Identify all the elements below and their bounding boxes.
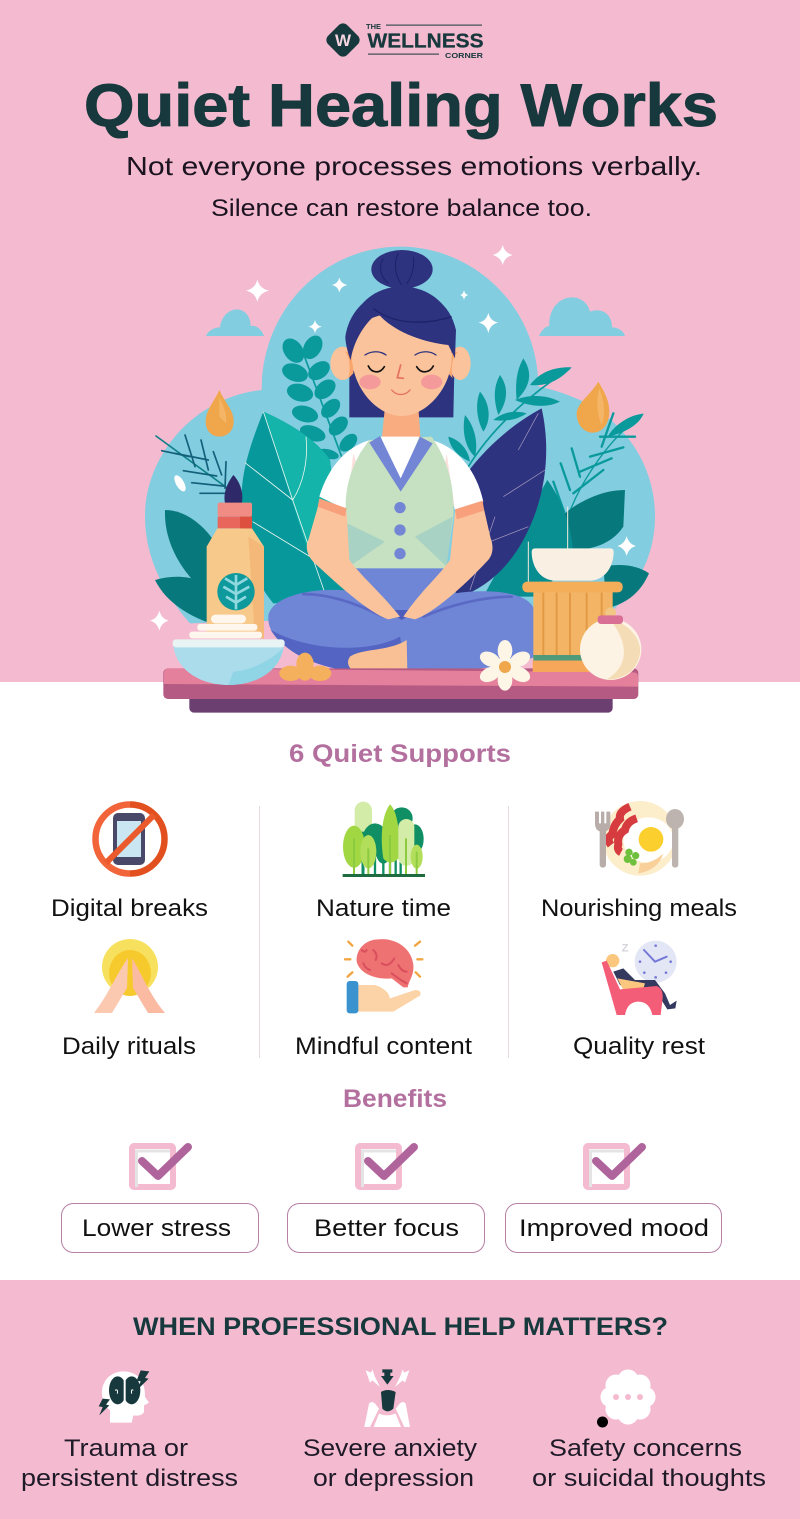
shirt sleeves — [319, 440, 483, 510]
foot — [348, 640, 407, 673]
face details — [359, 352, 442, 394]
dark teal back leaves — [155, 490, 649, 625]
illustration: meditating woman — [145, 245, 655, 713]
pedestal — [522, 507, 623, 672]
daisy — [477, 640, 533, 691]
label: safety concerns or suicidal thoughts — [532, 1435, 766, 1492]
face — [352, 314, 452, 416]
top pink background — [0, 0, 800, 682]
benefit: Better focus — [288, 1146, 484, 1252]
column divider right — [508, 806, 509, 1058]
almond drop right — [577, 382, 609, 433]
benefit: Lower stress — [62, 1146, 258, 1252]
label: trauma or persistent distress: Trauma or — [64, 1435, 188, 1462]
clouds — [206, 297, 625, 336]
logo: The Wellness Corner — [324, 21, 484, 60]
benefit: Lower stress: Lower stress — [82, 1215, 231, 1242]
arms and hands — [307, 498, 493, 619]
benefit: Better focus: Better focus — [314, 1215, 459, 1242]
icon: person under pressure — [364, 1369, 410, 1427]
label: severe anxiety or depression: Severe anxiety — [303, 1435, 477, 1462]
fringe hair — [345, 289, 456, 360]
label: Mindful content: Mindful content — [295, 1033, 472, 1060]
orange blossom — [279, 653, 331, 681]
logo: The Wellness Corner: CORNER — [445, 51, 484, 60]
label: severe anxiety or depression: or depression — [313, 1465, 474, 1492]
neck — [382, 407, 421, 440]
icon: breakfast plate — [595, 801, 684, 876]
logo: The Wellness Corner: WELLNESS — [368, 30, 484, 52]
label: trauma or persistent distress — [21, 1435, 238, 1492]
logo: The Wellness Corner: W — [335, 31, 352, 50]
icon: resting by clock — [602, 941, 677, 1015]
subtitle line two: Silence can restore balance too. — [211, 195, 592, 222]
hair bun — [371, 250, 433, 289]
icon: brain on hand — [345, 939, 422, 1013]
right spiky fern — [553, 413, 642, 520]
big teal leaf — [242, 412, 347, 603]
label: safety concerns or suicidal thoughts: or suicidal thoughts — [532, 1465, 766, 1492]
blue backdrop — [145, 247, 655, 623]
hair back — [349, 287, 455, 417]
stacked towels and bowl — [173, 615, 285, 685]
ears — [330, 347, 471, 380]
heading: 6 Quiet Supports: 6 Quiet Supports — [289, 740, 511, 768]
left spiky fern — [156, 435, 230, 493]
icon: thought bubble — [597, 1370, 656, 1428]
title: Quiet Healing Works — [84, 72, 718, 139]
heading: when professional help matters: WHEN PROFESSIONAL HELP MATTERS? — [133, 1313, 668, 1341]
icon: forest — [343, 802, 425, 877]
label: Nature time: Nature time — [316, 895, 451, 922]
benefit: Improved mood — [506, 1146, 722, 1252]
centre right fern — [448, 358, 572, 467]
icon: no phone — [96, 804, 164, 874]
label: Digital breaks: Digital breaks — [51, 895, 208, 922]
centre left fern — [278, 332, 361, 461]
label: Quality rest: Quality rest — [573, 1033, 705, 1060]
label: severe anxiety or depression — [303, 1435, 477, 1492]
trousers — [268, 568, 535, 672]
almond drop left — [206, 390, 234, 437]
column divider left — [259, 806, 260, 1058]
bottle — [207, 475, 264, 638]
mid teal leaf behind right — [483, 480, 573, 597]
bottom pink panel background — [0, 1280, 800, 1519]
heading: Benefits: Benefits — [343, 1085, 447, 1113]
platform — [163, 668, 638, 713]
label: Daily rituals: Daily rituals — [62, 1033, 196, 1060]
subtitle line one: Not everyone processes emotions verbally. — [126, 151, 702, 181]
label: Nourishing meals: Nourishing meals — [541, 895, 737, 922]
label: trauma or persistent distress: persistent distress — [21, 1465, 238, 1492]
benefit: Improved mood: Improved mood — [519, 1215, 709, 1242]
icon: head with brain and lightning — [99, 1370, 149, 1423]
label: safety concerns or suicidal thoughts: Safety concerns — [549, 1435, 742, 1462]
navy leaf — [455, 408, 546, 598]
logo: The Wellness Corner: THE — [366, 22, 381, 31]
icon: praying hands — [94, 939, 165, 1013]
perfume bottle — [580, 607, 641, 680]
icon: resting by clock: Z — [622, 943, 629, 955]
sparkles — [150, 245, 636, 631]
vest — [346, 436, 454, 568]
